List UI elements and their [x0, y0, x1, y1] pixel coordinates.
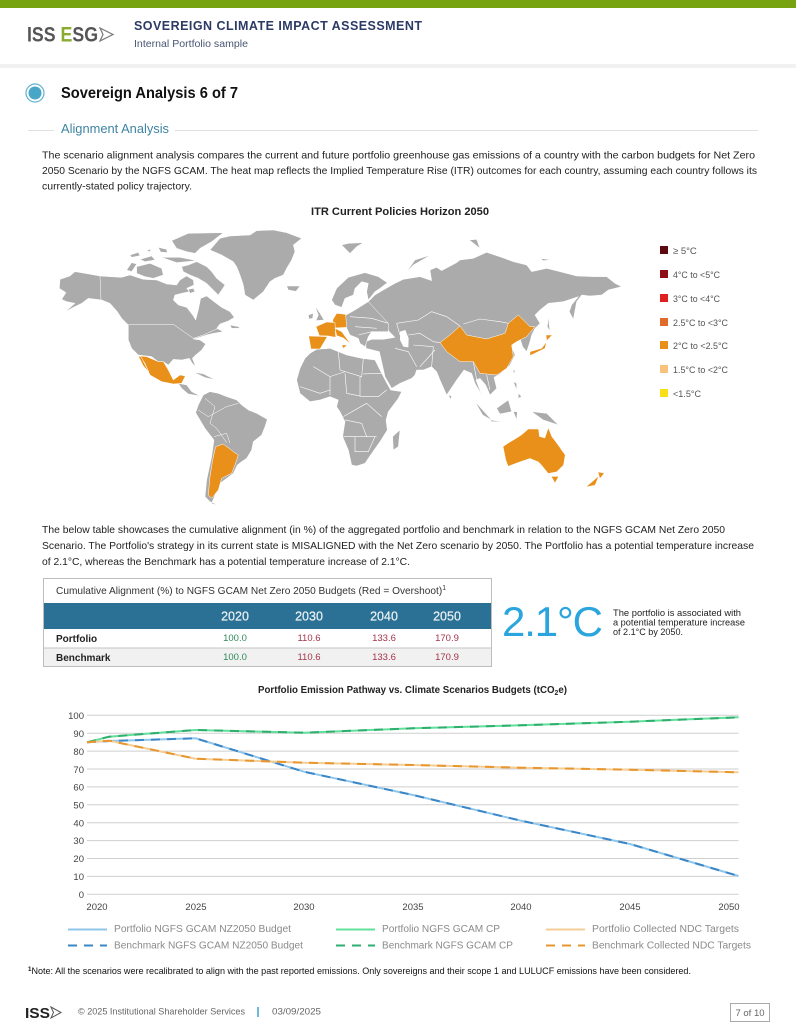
footnote: Note: All the scenarios were recalibrated to align with the past reported emissions. Only sovereigns and their scope 1 and LULUCF emissions have been considered.	[31, 966, 691, 977]
x axis labels: 2050	[718, 902, 740, 913]
y axis labels: 30	[73, 836, 84, 847]
table title: 1	[442, 585, 446, 592]
x axis labels	[86, 902, 740, 913]
x axis labels: 2025	[185, 902, 207, 913]
world map	[59, 230, 622, 505]
table row: portfolio: 133.6	[372, 633, 396, 644]
series: portfolio NDC and benchmark NDC	[87, 741, 738, 772]
page number box	[730, 1004, 770, 1022]
table row: portfolio: 110.6	[297, 633, 321, 644]
intro paragraph	[42, 150, 757, 192]
y axis labels: 0	[79, 890, 84, 901]
second paragraph: Scenario. The Portfolio's strategy in its current state is MISALIGNED with the Net Zero scenario by 2050. The Portfolio has a potential temperature increase	[42, 540, 754, 552]
report title: SOVEREIGN CLIMATE IMPACT ASSESSMENT	[134, 19, 422, 33]
legend item: 3 to 4: 3°C to <4°C	[673, 294, 720, 305]
footer logo: ISS	[25, 1005, 50, 1022]
footnote: 1	[28, 966, 32, 973]
alignment table	[44, 578, 492, 666]
sub-heading: alignment analysis: Alignment Analysis	[61, 122, 169, 136]
intro paragraph: 2050 Scenario by the NGFS GCAM. The heat map reflects the Implied Temperature Rise (ITR) outcomes for each country, assuming each country follows its	[42, 165, 757, 177]
second paragraph: The below table showcases the cumulative alignment (in %) of the aggregated portfolio and benchmark in relation to the NGFS GCAM Net Zero 2050	[42, 524, 725, 536]
y axis labels: 10	[73, 872, 84, 883]
y axis labels: 60	[73, 782, 84, 794]
legend item: 4 to 5: 4°C to <5°C	[673, 270, 720, 281]
section heading: Sovereign Analysis 6 of 7	[61, 85, 238, 102]
table row: portfolio	[56, 633, 459, 645]
map title: ITR Current Policies Horizon 2050	[311, 206, 489, 218]
chart legend: Benchmark NGFS GCAM CP	[382, 940, 513, 952]
table row: benchmark	[44, 648, 491, 666]
legend item: below 1.5	[660, 389, 701, 400]
y axis labels: 70	[73, 765, 84, 776]
y axis labels: 50	[73, 800, 84, 812]
x axis labels: 2045	[619, 902, 641, 913]
temperature callout: 2.1°C	[502, 598, 603, 645]
header logo: ISS ESG: ISS ESG	[27, 24, 98, 46]
section bullet icon	[26, 84, 44, 102]
footer divider	[257, 1007, 259, 1017]
chart legend	[68, 924, 751, 952]
temperature note: of 2.1°C by 2050.	[613, 627, 683, 637]
line chart title: e)	[558, 685, 567, 696]
chart legend: Portfolio Collected NDC Targets	[592, 924, 739, 935]
map: Americas and Arctic	[59, 230, 302, 505]
table title: Cumulative Alignment (%) to NGFS GCAM Net Zero 2050 Budgets (Red = Overshoot)	[56, 585, 456, 597]
line chart title: 2	[555, 690, 558, 697]
y axis labels: 40	[73, 818, 84, 830]
y axis labels: 80	[73, 747, 84, 758]
table row: benchmark: 133.6	[372, 652, 396, 663]
x axis labels: 2040	[510, 902, 532, 913]
table header row	[44, 603, 491, 629]
x axis labels: 2030	[293, 902, 315, 913]
table header row: 2020	[221, 610, 249, 624]
table row: portfolio: 100.0	[223, 633, 247, 644]
temperature note	[613, 608, 745, 637]
y axis labels: 90	[73, 729, 84, 740]
table row: benchmark: 100.0	[223, 652, 247, 663]
chart legend: Portfolio NGFS GCAM CP	[382, 924, 500, 935]
series: portfolio budget and benchmark budget	[87, 738, 738, 876]
y axis labels: 100	[68, 711, 84, 722]
header separator	[0, 64, 796, 68]
temperature note: a potential temperature increase	[613, 618, 745, 628]
table row: benchmark: 170.9	[435, 652, 459, 663]
y axis labels	[68, 711, 84, 901]
temperature note: The portfolio is associated with	[613, 608, 741, 618]
table row: portfolio: 170.9	[435, 633, 459, 644]
table row: portfolio: Portfolio	[56, 634, 97, 645]
series: portfolio CP and benchmark CP	[87, 717, 738, 742]
x axis labels: 2020	[86, 902, 108, 913]
top green bar	[0, 0, 796, 8]
footer date: 03/09/2025	[272, 1006, 321, 1018]
page number box: 7 of 10	[735, 1008, 765, 1019]
x axis labels: 2035	[402, 902, 424, 913]
chart legend: Benchmark Collected NDC Targets	[592, 940, 751, 952]
second paragraph: of 2.1°C, whereas the Benchmark has a potential temperature increase of 2.1°C.	[42, 556, 410, 568]
report subtitle: Internal Portfolio sample	[134, 38, 248, 50]
table header row: 2030	[295, 610, 323, 624]
table header row: 2050	[433, 610, 461, 624]
chart legend: Benchmark NGFS GCAM NZ2050 Budget	[114, 940, 303, 952]
legend item: below 1.5: <1.5°C	[673, 389, 701, 400]
line chart title: Portfolio Emission Pathway vs. Climate Scenarios Budgets (tCO	[258, 685, 563, 696]
table header row: 2040	[370, 610, 398, 624]
intro paragraph: The scenario alignment analysis compares the current and future portfolio greenhouse gas emissions of a country with the carbon budgets for Net Zero	[42, 150, 755, 162]
y axis labels: 20	[73, 854, 84, 865]
footer logo	[25, 1005, 61, 1022]
legend item: 5 and above	[660, 246, 697, 257]
map: Europe, Africa, Asia, Oceania	[297, 239, 622, 487]
line chart	[68, 711, 740, 913]
legend item: 5 and above: ≥ 5°C	[673, 246, 697, 257]
legend item: 2 to 2.5: 2°C to <2.5°C	[673, 341, 728, 352]
intro paragraph: currently-stated policy trajectory.	[42, 180, 192, 192]
table row: benchmark: Benchmark	[56, 653, 111, 664]
chart legend: Portfolio NGFS GCAM NZ2050 Budget	[114, 924, 291, 935]
legend item: 2.5 to 3: 2.5°C to <3°C	[673, 318, 728, 329]
second paragraph	[42, 524, 754, 568]
table row: benchmark: 110.6	[297, 652, 321, 663]
map legend	[660, 246, 728, 400]
legend item: 1.5 to 2: 1.5°C to <2°C	[673, 365, 728, 376]
footer copyright: © 2025 Institutional Shareholder Services	[78, 1006, 245, 1018]
